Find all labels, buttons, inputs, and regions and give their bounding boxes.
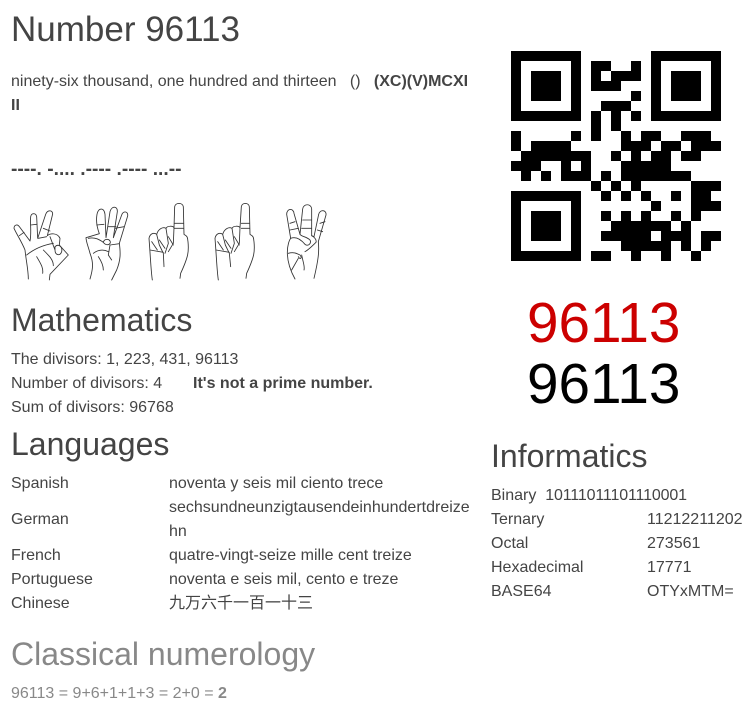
row: octal: Octal bbox=[491, 535, 528, 552]
number name and roman numeral: II bbox=[11, 97, 20, 114]
row: German: hn bbox=[169, 523, 187, 540]
row: Chinese: Chinese bbox=[11, 595, 70, 612]
row: hexadecimal bbox=[491, 559, 692, 576]
heading: classical numerology: Classical numerology bbox=[11, 636, 315, 672]
numerology calculation: 96113 = 9+6+1+1+3 = 2+0 = 2 bbox=[11, 685, 227, 702]
row: base64: OTYxMTM= bbox=[647, 583, 734, 600]
row: Portuguese: noventa e seis mil, cento e treze bbox=[169, 571, 398, 588]
mathematics facts bbox=[11, 351, 373, 416]
title: Number 96113 bbox=[11, 10, 240, 49]
row: Portuguese bbox=[11, 571, 398, 588]
row: Spanish bbox=[11, 475, 383, 492]
icon: sign language hands bbox=[14, 203, 326, 280]
row: German bbox=[11, 499, 470, 540]
row: binary: Binary 10111011101110001 bbox=[491, 487, 687, 504]
large number in red: 96113 bbox=[527, 292, 680, 355]
row: octal bbox=[491, 535, 700, 552]
number name and roman numeral bbox=[11, 73, 468, 114]
row: Portuguese: Portuguese bbox=[11, 571, 93, 588]
heading: informatics: Informatics bbox=[491, 438, 647, 474]
languages table bbox=[11, 475, 470, 612]
row: German: German bbox=[11, 511, 69, 528]
hand: one bbox=[215, 203, 254, 280]
heading: mathematics: Mathematics bbox=[11, 302, 192, 338]
hand: three bbox=[287, 205, 326, 279]
prime status: It's not a prime number. bbox=[193, 375, 373, 392]
sum of divisors: Sum of divisors: 96768 bbox=[11, 399, 174, 416]
informatics table bbox=[491, 487, 743, 600]
number name and roman numeral: ninety-six thousand, one hundred and thirteen () (XC)(V)MCXI bbox=[11, 73, 468, 90]
row: octal: 273561 bbox=[647, 535, 700, 552]
row: Chinese bbox=[11, 594, 313, 612]
morse code: ----. -.... .---- .---- ...-- bbox=[11, 159, 181, 180]
row: ternary bbox=[491, 511, 743, 528]
row: ternary: 11212211202 bbox=[647, 511, 743, 528]
hand: six bbox=[86, 207, 128, 280]
hand: nine bbox=[14, 211, 68, 280]
row: Spanish: noventa y seis mil ciento trece bbox=[169, 475, 383, 492]
row: French bbox=[11, 547, 412, 564]
row: French: French bbox=[11, 547, 61, 564]
hand: one bbox=[149, 203, 188, 280]
row: Spanish: Spanish bbox=[11, 475, 69, 492]
number of divisors: Number of divisors: 4 bbox=[11, 375, 162, 392]
row: hexadecimal: 17771 bbox=[647, 559, 692, 576]
row: base64: BASE64 bbox=[491, 583, 551, 600]
large number in black: 96113 bbox=[527, 353, 680, 416]
row: French: quatre-vingt-seize mille cent treize bbox=[169, 547, 412, 564]
row: ternary: Ternary bbox=[491, 511, 544, 528]
row: hexadecimal: Hexadecimal bbox=[491, 559, 583, 576]
QR code bbox=[511, 51, 721, 261]
row: base64 bbox=[491, 583, 734, 600]
divisors list: The divisors: 1, 223, 431, 96113 bbox=[11, 351, 238, 368]
heading: languages: Languages bbox=[11, 426, 169, 462]
row: German: sechsundneunzigtausendeinhundertdreize bbox=[169, 499, 470, 516]
row: Chinese: 九万六千一百一十三 bbox=[169, 595, 313, 612]
